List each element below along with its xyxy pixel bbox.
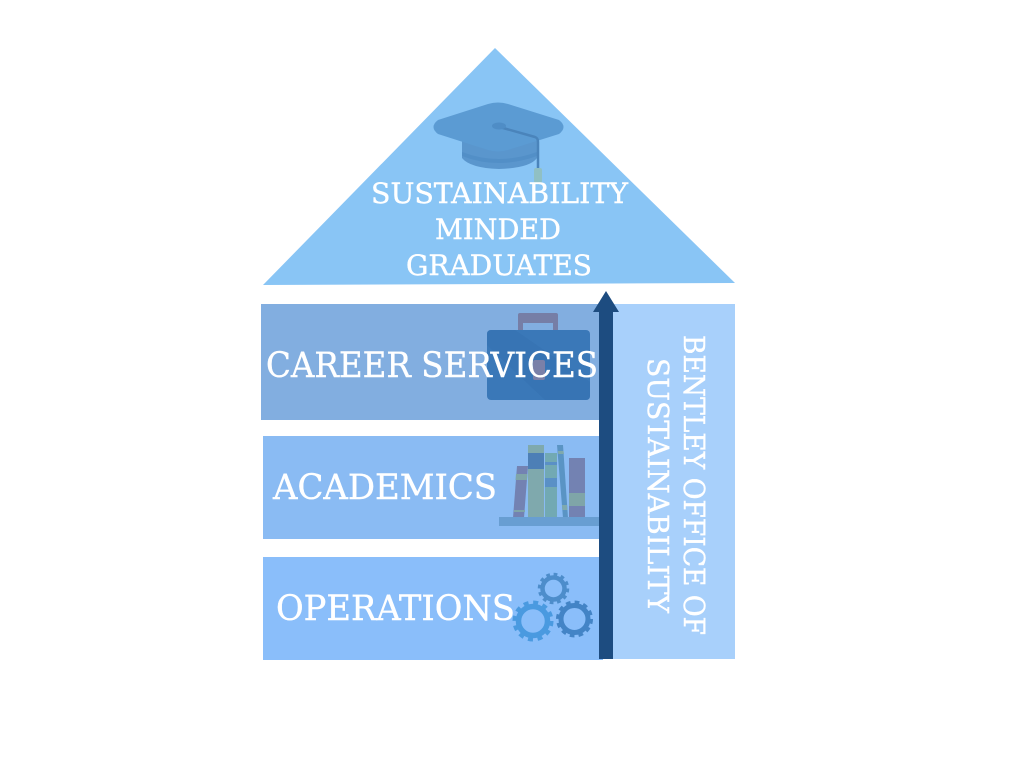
side label: BENTLEY OFFICE OF bbox=[677, 335, 711, 635]
panel: academics bbox=[263, 436, 600, 539]
roof heading: MINDED bbox=[435, 213, 561, 246]
panel: bentley office of sustainability bbox=[600, 304, 735, 659]
icon: graduation cap bbox=[434, 102, 564, 183]
arrow: upward bbox=[593, 291, 619, 659]
panel: career services bbox=[261, 304, 600, 420]
roof triangle bbox=[263, 48, 735, 285]
roof heading: SUSTAINABILITY bbox=[371, 177, 629, 210]
panel: roof bbox=[263, 48, 735, 285]
operations label: OPERATIONS bbox=[276, 589, 515, 629]
panel: operations bbox=[263, 557, 603, 660]
roof heading: GRADUATES bbox=[406, 249, 592, 282]
operations band bbox=[263, 557, 603, 660]
icon: books bbox=[499, 445, 600, 526]
side column bbox=[600, 304, 735, 659]
academics label: ACADEMICS bbox=[272, 468, 497, 508]
side label: SUSTAINABILITY bbox=[641, 358, 675, 614]
icon: gears bbox=[514, 574, 591, 640]
roof heading bbox=[371, 177, 629, 282]
career band bbox=[261, 304, 600, 420]
side label bbox=[641, 335, 711, 635]
icon: briefcase bbox=[487, 313, 590, 400]
academics band bbox=[263, 436, 600, 539]
career label: CAREER SERVICES bbox=[266, 346, 598, 386]
